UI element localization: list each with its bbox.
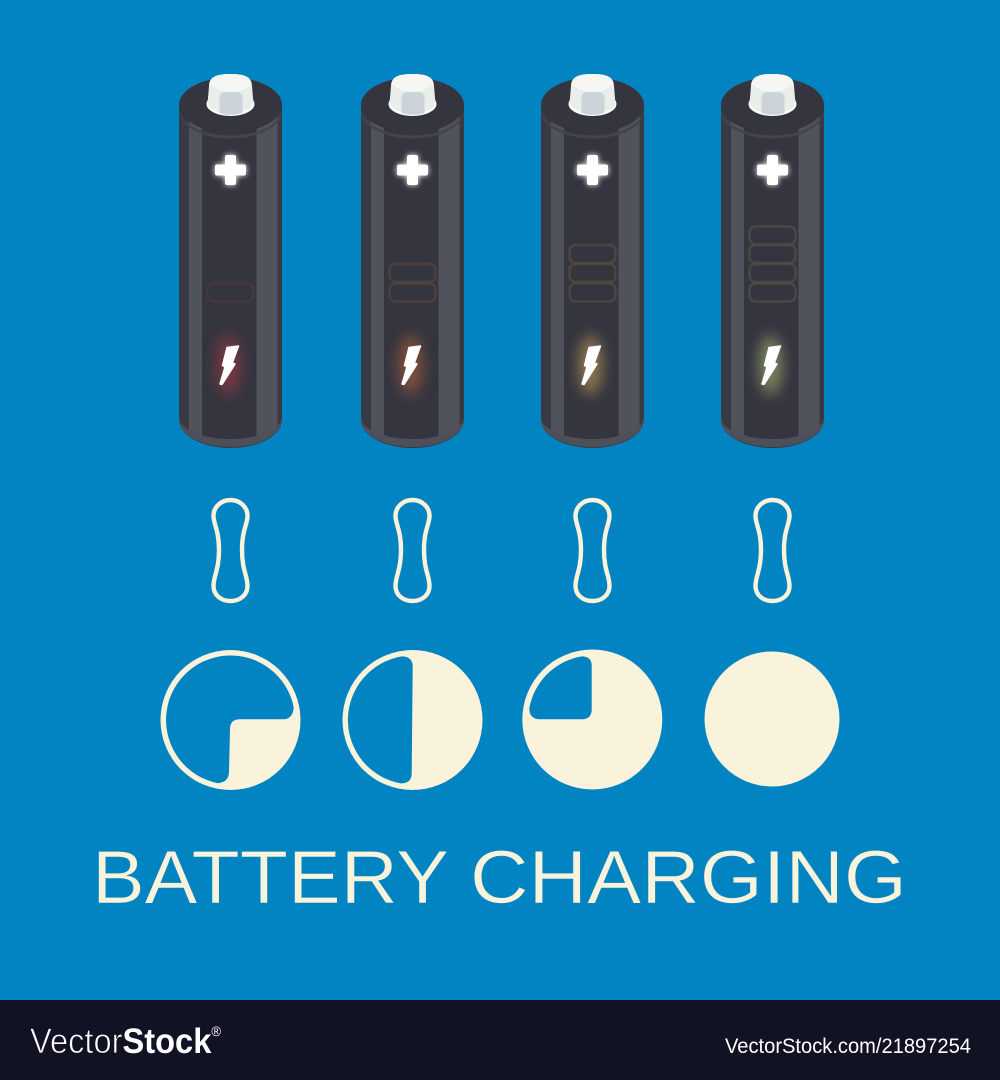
footer image id: VectorStock.com/21897254	[725, 1035, 971, 1058]
icon: pill outline 1	[214, 500, 248, 601]
gauge: quarter charged	[160, 650, 300, 790]
battery 3: three charge cells, amber bolt	[541, 74, 644, 448]
title	[92, 835, 907, 919]
logo text: ®	[211, 1023, 222, 1039]
title: CHARGING	[470, 835, 907, 919]
icon: pill outline 4	[756, 500, 790, 601]
gauge: fully charged	[704, 652, 840, 786]
icon: pill outline 2	[396, 500, 430, 601]
icon: pill outline 3	[576, 500, 610, 601]
battery 4: four charge cells, green bolt	[721, 74, 824, 448]
gauge: half charged	[342, 650, 482, 790]
battery 2: two charge cells, orange bolt	[361, 74, 464, 448]
gauge: three-quarters charged	[522, 650, 662, 790]
logo text: VectorStock	[30, 1022, 218, 1061]
title: BATTERY	[92, 835, 449, 919]
battery 1: one charge cell, red bolt	[179, 74, 282, 448]
footer bar	[0, 1000, 1000, 1080]
